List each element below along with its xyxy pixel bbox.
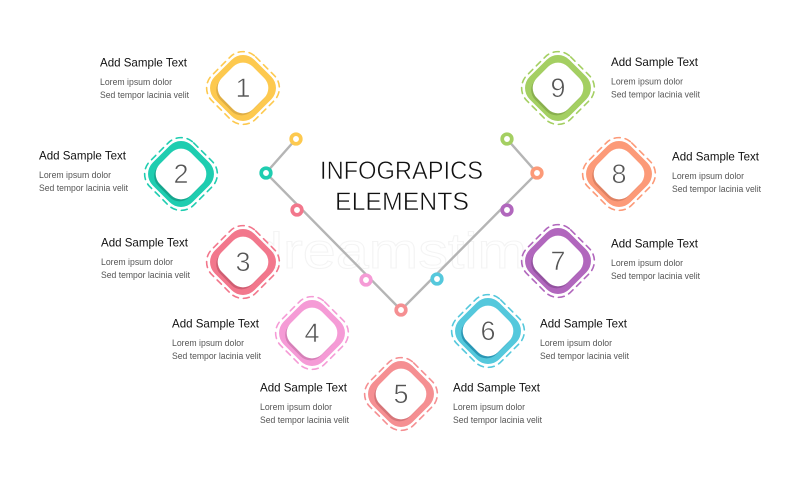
badge 3: 3: [235, 247, 251, 277]
text block 5 left: [260, 380, 350, 425]
badge 8: [575, 130, 663, 218]
text block 8: Lorem ipsum dolor: [672, 171, 744, 181]
text block 8: Sed tempor lacinia velit: [672, 184, 762, 194]
text block 2: Sed tempor lacinia velit: [39, 183, 129, 193]
text block 7: Lorem ipsum dolor: [611, 258, 683, 268]
text block 5 right: Add Sample Text: [453, 380, 541, 394]
badge 9: 9: [550, 73, 566, 103]
title: ELEMENTS: [335, 188, 469, 216]
text block 5 left: Sed tempor lacinia velit: [260, 415, 350, 425]
text block 6: Add Sample Text: [540, 316, 628, 330]
text block 9: Lorem ipsum dolor: [611, 76, 683, 86]
text block 8: [672, 150, 762, 194]
badge 6: 6: [480, 316, 496, 346]
badge 9: [514, 44, 602, 132]
text: dreamstime: [250, 223, 560, 279]
text block 5 right: Lorem ipsum dolor: [453, 402, 525, 412]
badge 5: 5: [393, 379, 409, 409]
text block 7: [611, 236, 701, 281]
connector line: [266, 139, 537, 310]
text block 2: [39, 148, 129, 193]
badge 8: 8: [611, 159, 627, 189]
text block 3: Sed tempor lacinia velit: [101, 270, 191, 280]
badge 1: 1: [235, 73, 251, 103]
badge 7: 7: [550, 246, 566, 276]
text block 4: [172, 316, 262, 361]
text block 8: Add Sample Text: [672, 150, 760, 164]
text block 6: Sed tempor lacinia velit: [540, 351, 630, 361]
text block 5 right: Sed tempor lacinia velit: [453, 415, 543, 425]
text block 4: Add Sample Text: [172, 316, 260, 330]
text block 7: Sed tempor lacinia velit: [611, 271, 701, 281]
text block 5 left: Lorem ipsum dolor: [260, 402, 332, 412]
text block 1: [100, 56, 190, 100]
connector nodes: [261, 134, 542, 315]
badge 5: [357, 350, 445, 438]
text block 4: Sed tempor lacinia velit: [172, 351, 262, 361]
text block 3: [101, 236, 191, 280]
badge 4: [268, 289, 356, 377]
text block 9: Add Sample Text: [611, 55, 699, 69]
title: INFOGRAPICS: [320, 157, 483, 185]
text block 1: Sed tempor lacinia velit: [100, 90, 190, 100]
text block 3: Lorem ipsum dolor: [101, 257, 173, 267]
badge 7: [514, 217, 602, 305]
text block 1: Lorem ipsum dolor: [100, 77, 172, 87]
title: [320, 157, 483, 216]
text block 6: Lorem ipsum dolor: [540, 338, 612, 348]
badge 2: [137, 130, 225, 218]
text block 7: Add Sample Text: [611, 236, 699, 250]
text block 9: Sed tempor lacinia velit: [611, 90, 701, 100]
text block 5 left: Add Sample Text: [260, 380, 348, 394]
badge 6: [444, 287, 532, 375]
badge 1: [199, 44, 287, 132]
text block 5 right: [453, 380, 543, 425]
badge 3: [199, 218, 287, 306]
text block 2: Lorem ipsum dolor: [39, 170, 111, 180]
text block 2: Add Sample Text: [39, 148, 127, 162]
text block 1: Add Sample Text: [100, 56, 188, 70]
text block 3: Add Sample Text: [101, 236, 189, 250]
text block 6: [540, 316, 630, 361]
text block 4: Lorem ipsum dolor: [172, 338, 244, 348]
badge 4: 4: [304, 318, 320, 348]
text block 9: [611, 55, 701, 100]
badge 2: 2: [173, 159, 189, 189]
